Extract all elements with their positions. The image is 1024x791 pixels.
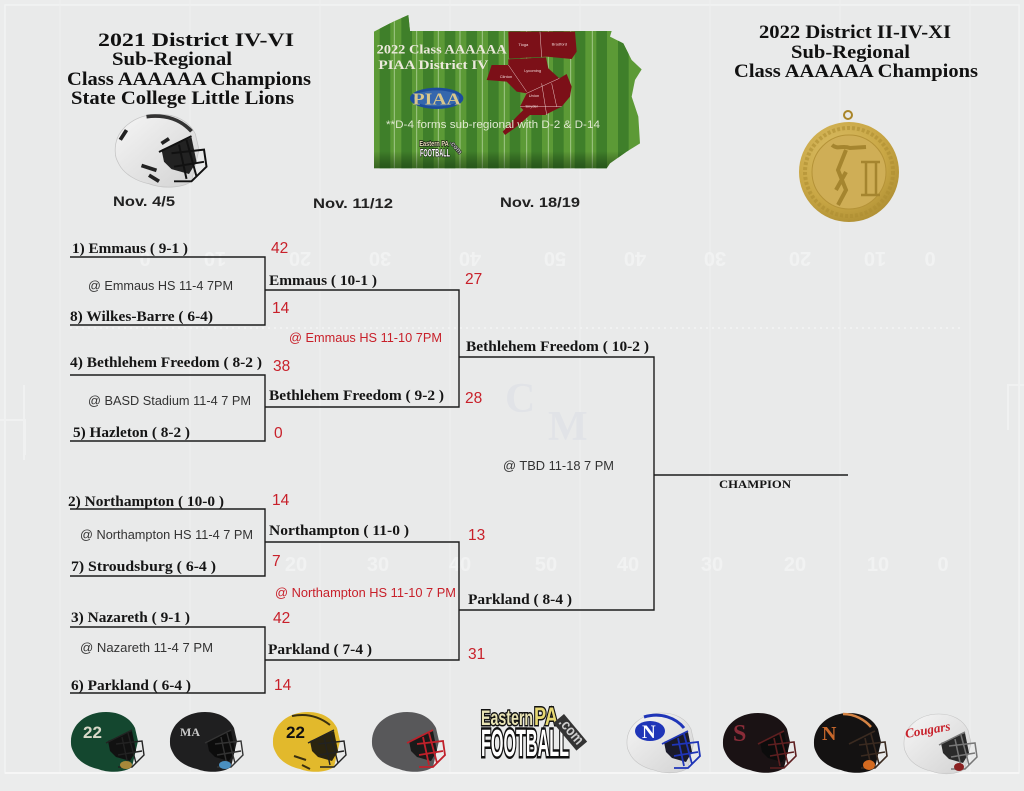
left title: 2021 champions: [67, 31, 311, 109]
right title: 2022 champions: Sub-Regional: [791, 43, 910, 63]
round 1 teams: 5) Hazleton ( 8-2 ): [73, 425, 190, 441]
left title: 2021 champions: 2021 District IV-VI: [98, 31, 294, 51]
round 1 teams: [68, 241, 262, 694]
scores: [271, 240, 485, 694]
round dates: [113, 193, 580, 211]
round 2 teams: Parkland ( 7-4 ): [268, 642, 372, 658]
field background: 30: [701, 554, 723, 576]
helmet: black and maroon: [723, 713, 796, 773]
map heading: 2022 Class AAAAAA: [377, 42, 508, 56]
district counties: Tioga: [518, 42, 529, 47]
right title: 2022 champions: 2022 District II-IV-XI: [759, 23, 951, 43]
scores: 14: [272, 300, 290, 317]
field background: 10: [204, 247, 226, 269]
scores: 13: [468, 527, 485, 544]
field background: 10: [867, 554, 889, 576]
helmet: white and blue: [627, 713, 700, 773]
icon: PIAA logo: PIAA: [413, 90, 461, 109]
round 1 teams: 6) Parkland ( 6-4 ): [71, 678, 191, 694]
round 1 teams: 8) Wilkes-Barre ( 6-4): [70, 309, 213, 325]
district counties: Snyder: [525, 103, 539, 108]
scores: 27: [465, 271, 482, 288]
field background: 40: [617, 554, 639, 576]
round 2 teams: Emmaus ( 10-1 ): [269, 273, 377, 289]
helmet: black and maroon: S: [733, 721, 746, 747]
round 1 teams: 1) Emmaus ( 9-1 ): [72, 241, 188, 257]
semifinal venues in red: @ Emmaus HS 11-10 7PM: [289, 331, 442, 345]
field background: 0: [924, 247, 936, 269]
field background: 50: [535, 554, 557, 576]
field background: 20: [289, 247, 311, 269]
left title: 2021 champions: State College Little Lions: [71, 89, 294, 109]
field background: 40: [624, 247, 646, 269]
round 1 teams: 3) Nazareth ( 9-1 ): [71, 610, 190, 626]
field background: 50: [544, 247, 566, 269]
icon: State College helmet: [115, 114, 206, 187]
helmet: green: [71, 712, 144, 772]
district counties: [487, 32, 577, 135]
helmet: gold: [273, 712, 346, 772]
field background: 0: [937, 554, 949, 576]
scores: 42: [271, 240, 288, 257]
helmet: white and blue: N: [642, 722, 656, 743]
round 3 teams: Parkland ( 8-4 ): [468, 592, 572, 608]
right title: 2022 champions: Class AAAAAA Champions: [734, 62, 978, 82]
district counties: Bradford: [552, 41, 567, 46]
round 1 teams: 4) Bethlehem Freedom ( 8-2 ): [70, 355, 262, 371]
field background: 20: [285, 554, 307, 576]
scores: 0: [274, 425, 283, 442]
logo: Eastern PA Football: Eastern: [481, 707, 533, 730]
field background: 20: [789, 247, 811, 269]
round 2 teams: Northampton ( 11-0 ): [269, 523, 409, 539]
field background: C: [505, 376, 535, 422]
right title: 2022 champions: [734, 23, 978, 82]
field background: 30: [369, 247, 391, 269]
scores: 14: [274, 677, 292, 694]
round dates: Nov. 18/19: [500, 194, 580, 210]
district counties: Union: [529, 93, 539, 98]
icon: mini Eastern PA Football logo: [419, 139, 463, 160]
helmet: black: [170, 712, 243, 772]
helmet: gold: 22: [286, 723, 305, 742]
logo: Eastern PA Football: PA: [534, 703, 558, 731]
field background: 0: [139, 247, 151, 269]
map: Pennsylvania District IV: [370, 13, 647, 170]
round 3 teams: Bethlehem Freedom ( 10-2 ): [466, 339, 649, 355]
map note: **D-4 forms sub-regional with D-2 & D-14: [386, 119, 600, 131]
scores: 28: [465, 390, 482, 407]
round dates: Nov. 4/5: [113, 193, 175, 209]
field background: 40: [459, 247, 481, 269]
champion label: CHAMPION: [719, 477, 791, 491]
venues: @ BASD Stadium 11-4 7 PM: [88, 394, 251, 408]
scores: 14: [272, 492, 290, 509]
icon: mini Eastern PA Football logo: .com: [448, 139, 463, 156]
field background: 30: [367, 554, 389, 576]
logo: Eastern PA Football: FOOTBALL: [481, 723, 569, 765]
scores: 42: [273, 610, 290, 627]
venues: @ Emmaus HS 11-4 7PM: [88, 279, 233, 293]
helmet: black and orange: [814, 713, 887, 773]
icon: mini Eastern PA Football logo: FOOTBALL: [420, 148, 450, 160]
round 2 teams: Bethlehem Freedom ( 9-2 ): [269, 388, 444, 404]
district counties: Lycoming: [524, 68, 541, 73]
field background: M: [548, 404, 588, 450]
field background: 40: [449, 554, 471, 576]
venues: [80, 279, 614, 655]
left title: 2021 champions: Class AAAAAA Champions: [67, 70, 311, 90]
icon: gold medal: [799, 111, 899, 222]
helmet: green: 22: [83, 723, 102, 742]
logo: Eastern PA Football: [481, 703, 587, 765]
map heading: [377, 42, 508, 72]
round 3 teams: [466, 339, 649, 608]
scores: 7: [272, 553, 281, 570]
scores: 31: [468, 646, 485, 663]
left title: 2021 champions: Sub-Regional: [112, 50, 232, 70]
map heading: PIAA District IV: [378, 58, 488, 72]
semifinal venues in red: @ Northampton HS 11-10 7 PM: [275, 586, 456, 600]
scores: 38: [273, 358, 290, 375]
venues: @ TBD 11-18 7 PM: [503, 459, 614, 473]
venues: @ Northampton HS 11-4 7 PM: [80, 528, 253, 542]
helmet: grey and red: [372, 712, 445, 772]
icon: mini Eastern PA Football logo: Eastern PA: [419, 139, 449, 148]
helmet: black: MA: [180, 725, 200, 739]
logo: Eastern PA Football: .com: [555, 714, 587, 748]
helmet: white and red Cougars: Cougars: [904, 718, 951, 741]
round 1 teams: 7) Stroudsburg ( 6-4 ): [71, 559, 216, 575]
bracket lines: [70, 257, 848, 693]
semifinal venues in red: [275, 331, 456, 600]
venues: @ Nazareth 11-4 7 PM: [80, 641, 213, 655]
round 2 teams: [268, 273, 444, 658]
field background: 20: [784, 554, 806, 576]
helmet: white and red Cougars: [904, 714, 977, 774]
district counties: Clinton: [500, 74, 512, 79]
round dates: Nov. 11/12: [313, 195, 393, 211]
field background: 30: [704, 247, 726, 269]
helmet: black and orange: N: [822, 723, 837, 745]
round 1 teams: 2) Northampton ( 10-0 ): [68, 494, 224, 510]
field background: 10: [864, 247, 886, 269]
